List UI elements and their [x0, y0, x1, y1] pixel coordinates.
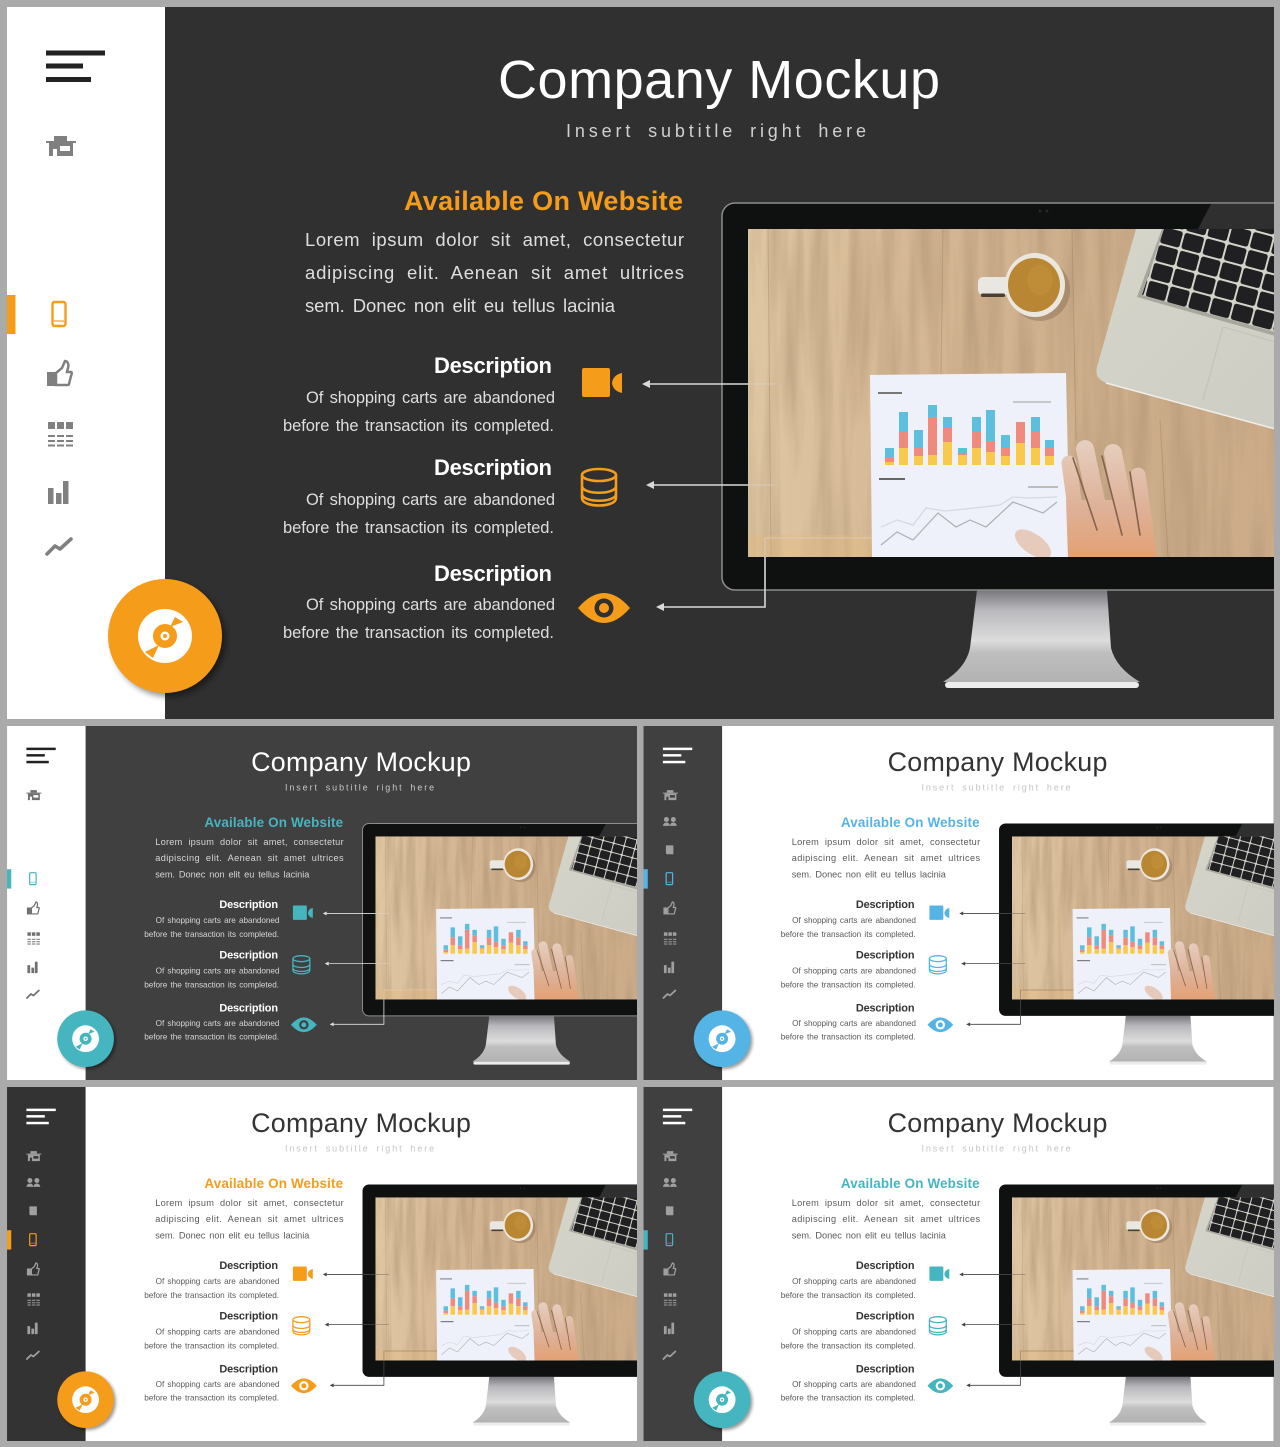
icon: eye: [291, 1017, 317, 1032]
badge: disc: [108, 579, 226, 697]
icon: video: [293, 905, 313, 920]
description 2: before the transaction its completed.: [781, 1342, 915, 1351]
description 2: Of shopping carts are abandoned: [306, 491, 555, 509]
description 1: Of shopping carts are abandoned: [792, 1277, 916, 1286]
icon: menu: [26, 748, 56, 763]
description 2: before the transaction its completed.: [144, 981, 279, 990]
sidebar icons: [46, 136, 76, 554]
description 1: before the transaction its completed.: [781, 1291, 915, 1300]
arrows: [323, 1272, 437, 1387]
sidebar icons: [663, 1151, 678, 1359]
description 2: [283, 455, 555, 537]
description 1: before the transaction its completed.: [781, 930, 915, 939]
description 3: Of shopping carts are abandoned: [156, 1380, 280, 1389]
subtitle: Insert subtitle right here: [566, 121, 866, 141]
badge: disc: [694, 1010, 752, 1069]
sidebar active tab: [7, 295, 66, 334]
paragraph: [792, 1198, 981, 1241]
description 2: [781, 1311, 916, 1351]
description 3: Of shopping carts are abandoned: [156, 1019, 280, 1028]
paragraph: adipiscing elit. Aenean sit amet ultrices: [792, 853, 981, 863]
paragraph: adipiscing elit. Aenean sit amet ultrices: [155, 1214, 344, 1224]
panel: small slide light orange: [7, 1087, 637, 1441]
subtitle: Insert subtitle right here: [921, 783, 1071, 793]
description 3: Description: [856, 1002, 914, 1014]
description 1: Of shopping carts are abandoned: [792, 916, 916, 925]
panel: main slide (dark, orange): [7, 7, 1274, 719]
description 1: Description: [219, 1260, 278, 1272]
description 1: [144, 1260, 280, 1300]
monitor mockup: [363, 823, 651, 1065]
description 1: [781, 899, 916, 939]
description 2: before the transaction its completed.: [781, 981, 915, 990]
description 2: before the transaction its completed.: [144, 1342, 279, 1351]
description 1: [144, 899, 280, 939]
title: Company Mockup: [888, 747, 1107, 777]
description 3: Description: [434, 561, 552, 586]
paragraph: [792, 837, 981, 880]
description 2: Description: [434, 455, 552, 480]
description 2: [781, 950, 916, 990]
description 1: Of shopping carts are abandoned: [156, 916, 280, 925]
description 2: Of shopping carts are abandoned: [792, 1328, 916, 1337]
heading: Available On Website: [404, 186, 683, 216]
heading: Available On Website: [204, 1176, 343, 1191]
description 3: [781, 1363, 916, 1403]
description 2: Of shopping carts are abandoned: [156, 1328, 280, 1337]
icon: database: [929, 956, 946, 974]
sidebar active tab: [644, 1230, 673, 1250]
sidebar icons: [26, 790, 41, 998]
description 2: Description: [856, 1311, 914, 1323]
paragraph: Lorem ipsum dolor sit amet, consectetur: [792, 837, 980, 847]
description 1: before the transaction its completed.: [283, 417, 554, 435]
paragraph: Lorem ipsum dolor sit amet, consectetur: [155, 1198, 344, 1208]
arrows: [959, 1272, 1074, 1387]
paragraph: Lorem ipsum dolor sit amet, consectetur: [155, 837, 344, 847]
icon: eye: [291, 1378, 317, 1393]
description 2: [144, 950, 280, 990]
badge: disc: [57, 1371, 116, 1430]
paragraph: [155, 1198, 344, 1241]
title: Company Mockup: [251, 1108, 471, 1138]
monitor mockup: [999, 1184, 1280, 1426]
description 3: Description: [856, 1363, 914, 1375]
icon: database: [293, 1317, 310, 1335]
icon: menu: [46, 50, 105, 82]
panel: small slide dark teal: [7, 726, 637, 1080]
description 3: Description: [219, 1002, 278, 1014]
description 3: before the transaction its completed.: [144, 1033, 279, 1042]
heading: Available On Website: [204, 815, 343, 830]
subtitle: Insert subtitle right here: [285, 1144, 434, 1154]
panel: small slide light teal: [644, 1087, 1274, 1441]
icon: menu: [26, 1109, 56, 1124]
description 1: Description: [219, 899, 278, 911]
sidebar icons: [663, 790, 678, 998]
monitor mockup: [363, 1184, 651, 1426]
monitor mockup: [999, 823, 1280, 1065]
sidebar icons: [26, 1151, 41, 1359]
icon: eye: [578, 593, 630, 623]
heading: Available On Website: [841, 1176, 980, 1191]
paragraph: adipiscing elit. Aenean sit amet ultrices: [305, 262, 684, 283]
icon: database: [582, 469, 616, 506]
paragraph: sem. Donec non elit eu tellus lacinia: [305, 295, 616, 316]
paragraph: sem. Donec non elit eu tellus lacinia: [792, 870, 947, 880]
title: Company Mockup: [888, 1108, 1107, 1138]
description 3: before the transaction its completed.: [283, 624, 554, 642]
monitor mockup: [722, 203, 1280, 688]
description 3: [283, 561, 555, 642]
paragraph: Lorem ipsum dolor sit amet, consectetur: [792, 1198, 980, 1208]
description 2: Description: [219, 950, 278, 962]
icon: video: [929, 1266, 949, 1281]
description 1: Of shopping carts are abandoned: [156, 1277, 280, 1286]
paragraph: adipiscing elit. Aenean sit amet ultrices: [155, 853, 344, 863]
description 3: [781, 1002, 916, 1042]
icon: eye: [927, 1378, 953, 1393]
paragraph: [305, 229, 684, 316]
subtitle: Insert subtitle right here: [921, 1144, 1071, 1154]
arrows: [959, 911, 1074, 1026]
description 3: Of shopping carts are abandoned: [306, 596, 555, 614]
description 1: [781, 1260, 916, 1300]
paragraph: [155, 837, 344, 880]
icon: video: [929, 905, 949, 920]
paragraph: sem. Donec non elit eu tellus lacinia: [155, 870, 310, 880]
icon: video: [293, 1266, 313, 1281]
description 2: Of shopping carts are abandoned: [792, 967, 916, 976]
description 3: Description: [219, 1363, 278, 1375]
sidebar active tab: [7, 869, 36, 889]
sidebar active tab: [644, 869, 673, 889]
description 2: Description: [219, 1311, 278, 1323]
icon: eye: [927, 1017, 953, 1032]
description 3: [144, 1363, 280, 1403]
description 1: before the transaction its completed.: [144, 930, 279, 939]
badge: disc: [694, 1371, 752, 1430]
description 1: [283, 353, 555, 435]
description 2: before the transaction its completed.: [283, 519, 554, 537]
description 3: [144, 1002, 280, 1042]
description 1: Of shopping carts are abandoned: [306, 389, 555, 407]
icon: menu: [663, 748, 692, 763]
description 3: Of shopping carts are abandoned: [792, 1380, 916, 1389]
description 2: Of shopping carts are abandoned: [156, 967, 280, 976]
description 2: [144, 1311, 280, 1351]
heading: Available On Website: [841, 815, 980, 830]
description 1: Description: [856, 899, 914, 911]
title: Company Mockup: [498, 50, 940, 110]
subtitle: Insert subtitle right here: [285, 783, 434, 793]
description 1: before the transaction its completed.: [144, 1291, 279, 1300]
icon: database: [293, 956, 310, 974]
paragraph: sem. Donec non elit eu tellus lacinia: [792, 1231, 947, 1241]
description 2: Description: [856, 950, 914, 962]
icon: video: [582, 368, 622, 397]
description 1: Description: [856, 1260, 914, 1272]
panel: small slide light blue: [644, 726, 1274, 1080]
description 1: Description: [434, 353, 552, 378]
description 3: Of shopping carts are abandoned: [792, 1019, 916, 1028]
title: Company Mockup: [251, 747, 471, 777]
description 3: before the transaction its completed.: [781, 1033, 915, 1042]
icon: menu: [663, 1109, 692, 1124]
description 3: before the transaction its completed.: [781, 1394, 915, 1403]
paragraph: Lorem ipsum dolor sit amet, consectetur: [305, 229, 684, 250]
icon: database: [929, 1317, 946, 1335]
badge: disc: [57, 1010, 116, 1069]
paragraph: sem. Donec non elit eu tellus lacinia: [155, 1231, 310, 1241]
description 3: before the transaction its completed.: [144, 1394, 279, 1403]
arrows: [642, 380, 872, 611]
paragraph: adipiscing elit. Aenean sit amet ultrices: [792, 1214, 981, 1224]
arrows: [323, 911, 437, 1026]
sidebar active tab: [7, 1230, 36, 1250]
